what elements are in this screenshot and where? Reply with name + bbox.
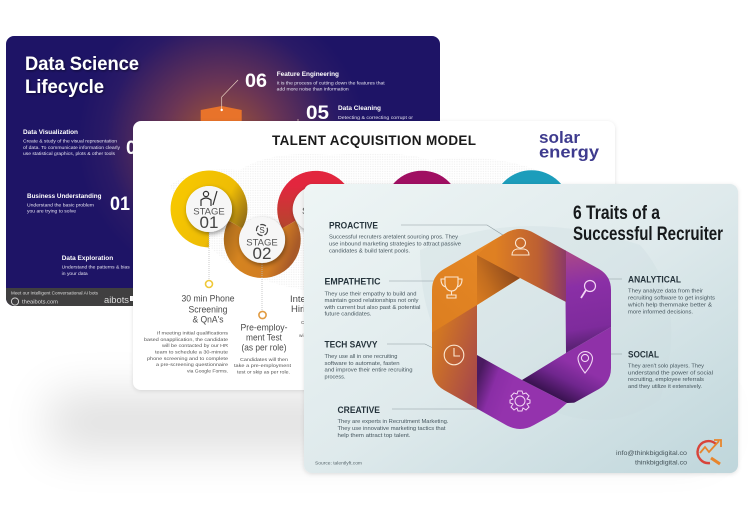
trait: empathetic: future candidates.	[324, 312, 372, 318]
connector lines	[387, 225, 622, 409]
stage 3 title	[290, 294, 328, 315]
step: business understanding: Understand the basic problem	[27, 202, 94, 207]
footer bar: Meet our Intelligent Conversational AI bots	[11, 290, 99, 296]
trait: social: SOCIAL	[628, 350, 659, 360]
icon: magnifier	[581, 280, 596, 298]
stage 2 disc: S	[259, 226, 265, 235]
trait: proactive: Successful recruters aretalent sourcing pros. They	[329, 235, 458, 241]
heading: data science lifecycle	[25, 53, 139, 98]
trait: tech savvy: and improve their entire recruiting	[324, 368, 412, 374]
stage 1 description: a pre-screening questionnaire	[156, 362, 228, 368]
stage 1 description: phone screening and to complete	[147, 356, 228, 362]
heading: data science lifecycle: Data Science	[25, 53, 139, 75]
trait: analytical: which help themmake better &	[627, 302, 712, 308]
stage 1 description	[144, 330, 229, 374]
trait: tech savvy: TECH SAVVY	[324, 340, 378, 350]
stage 1 description: team to schedule a 30-minute	[155, 349, 228, 355]
trait: social	[628, 350, 713, 390]
footer bar	[6, 288, 133, 306]
icon: trophy	[441, 277, 462, 298]
trait: empathetic: maintain good relationships not only	[324, 298, 419, 304]
stage 2 title: Pre-employ-	[240, 322, 288, 334]
footer bar: theaibots.com	[22, 300, 58, 306]
stage 3 title: Hiring	[291, 304, 316, 315]
trait: proactive: PROACTIVE	[329, 220, 378, 232]
stage 2 connector and marker	[259, 263, 266, 319]
stage 3 title: Interview	[290, 294, 328, 305]
trait: tech savvy: They use all in one recruiting	[324, 354, 398, 360]
stage 1 disc	[186, 186, 232, 232]
trait: creative	[338, 405, 449, 439]
hexagon ribbon	[432, 229, 611, 429]
stage 2 disc: 02	[253, 244, 271, 263]
heading: talent acquisition model: TALENT ACQUISITION MODEL	[272, 133, 476, 148]
stage 1 description: will be contacted by our HR	[162, 343, 229, 349]
trait: analytical: They analyze data from their	[628, 289, 703, 295]
trait: social: They aren't solo players. They	[628, 364, 704, 370]
stage 2 title	[240, 322, 288, 354]
step: data exploration: in your data	[62, 271, 88, 276]
icon: person	[512, 238, 529, 255]
stage 3 description: C	[301, 320, 305, 326]
step: data exploration	[62, 255, 130, 276]
step: data cleaning: Detecting & correcting corrupt or	[338, 115, 414, 120]
heading: six traits	[573, 202, 723, 245]
stage 1 disc: 01	[200, 213, 218, 232]
trait: empathetic: EMPATHETIC	[324, 276, 381, 288]
trait: tech savvy	[324, 340, 412, 380]
stage 2 description: test or skip as per role.	[237, 370, 290, 376]
stage 1 description: via Google Forms.	[187, 368, 228, 374]
trait: creative: They are experts in Recruitment Marketing.	[338, 419, 449, 425]
stage 2 title: ment Test	[246, 332, 282, 344]
contact details: thinkbigdigital.co	[635, 460, 687, 466]
stage 2 description: take a pre-employment	[234, 363, 292, 369]
step: data visualization: use statistical graphics, plots & other tools	[23, 151, 116, 156]
trait: social: recruiting, employee referrals	[628, 377, 704, 383]
step: data cleaning: 05	[306, 103, 329, 124]
contact details: info@thinkbigdigital.co	[616, 450, 687, 457]
trait: analytical: recruiting software to get insights	[628, 296, 715, 302]
trait: analytical	[627, 274, 715, 315]
trait: analytical: ANALYTICAL	[628, 274, 681, 286]
stage 3 description: wi	[299, 333, 304, 339]
stage 3 disc: S	[302, 206, 308, 217]
step: feature engineering: add more noise than information	[277, 86, 349, 92]
panel: data science lifecycle card	[6, 36, 440, 306]
logo: solar energy: solar	[539, 128, 580, 147]
stage 2 description: Candidates will then	[240, 357, 288, 363]
icon: map pin	[578, 352, 592, 373]
trait: empathetic: They use their empathy to build and	[324, 291, 416, 297]
ribbon: stage connector rings	[178, 178, 562, 270]
step: data visualization: Create & study of the visual representation	[23, 138, 117, 144]
stage 1 title: 30 min Phone	[182, 294, 234, 304]
step: data visualization: of data. To communicate information clearly	[23, 145, 121, 150]
trait: tech savvy: process.	[324, 374, 346, 380]
trait: creative: CREATIVE	[338, 405, 380, 416]
stage 2 title: (as per role)	[242, 342, 286, 354]
stage 1 title	[182, 294, 234, 326]
stage 1 description: based onapplication, the candidate	[144, 337, 228, 343]
faint world map	[420, 226, 671, 420]
icon: gear	[510, 391, 530, 411]
logo: solar energy	[539, 128, 600, 162]
stage 1 title: & QnA's	[192, 314, 224, 326]
step: feature engineering: It is the process of cutting down the features that	[277, 80, 385, 86]
step: data exploration: Data Exploration	[62, 255, 113, 262]
step: business understanding: 01	[110, 194, 130, 215]
step: data visualization: Data Visualization	[23, 129, 78, 136]
stage 1 disc: STAGE	[193, 206, 225, 218]
stage 3 description	[299, 320, 305, 339]
step: data exploration: Understand the patterns & bias	[62, 265, 130, 270]
icon: clock	[444, 345, 464, 365]
trait: proactive: use inbound marketing strategies to attract passive	[329, 241, 461, 247]
stage 2 disc	[239, 217, 285, 263]
stage 1 description: If meeting initial qualifications	[157, 330, 229, 336]
trait: proactive: candidates & build talent pools.	[329, 249, 410, 255]
trait: analytical: more informed decisions.	[628, 309, 693, 315]
step: feature engineering: 06	[245, 71, 267, 92]
heading: data science lifecycle: Lifecycle	[25, 76, 104, 98]
trait: tech savvy: software to automate, fasten	[324, 361, 400, 367]
step: business understanding: Business Understanding	[27, 193, 102, 200]
trait: empathetic	[323, 276, 420, 318]
step: data visualization: 02	[126, 138, 147, 159]
step: data cleaning	[306, 106, 413, 120]
soft ground shadow beneath the cards	[50, 395, 710, 450]
contact details	[616, 450, 687, 466]
trait: creative: help them attract top talent.	[338, 433, 411, 439]
trait: empathetic: with current but also past & potential	[323, 305, 420, 311]
stage 3 disc	[293, 186, 339, 232]
step: business understanding	[27, 193, 130, 215]
panel: talent acquisition model card	[133, 121, 615, 390]
stage 1 connector and marker	[206, 232, 212, 288]
trait: social: understand the power of social	[628, 371, 713, 377]
stage 2 description	[234, 357, 292, 376]
logo: solar energy: energy	[539, 142, 600, 162]
world map dots	[170, 153, 562, 292]
stage 2 disc: STAGE	[246, 238, 278, 248]
step: feature engineering: Feature Engineering	[277, 71, 339, 78]
trait: proactive	[329, 220, 461, 255]
step: data visualization	[23, 130, 133, 156]
trait: social: and they utilize it extensively.	[628, 384, 702, 390]
orange block with connector	[201, 80, 298, 125]
source note: Source: talentlyft.com	[315, 460, 362, 466]
trait: creative: They use innovative marketing tactics that	[338, 426, 446, 432]
stage 1 title: Screening	[188, 304, 228, 316]
heading: six traits: 6 Traits of a	[573, 202, 660, 224]
logo: think big digital	[698, 440, 721, 464]
footer bar: aibots	[104, 295, 130, 305]
step: feature engineering	[246, 72, 385, 90]
panel: six traits card	[304, 184, 738, 473]
step: business understanding: you are trying to solve	[27, 208, 76, 213]
step: data cleaning: Data Cleaning	[338, 105, 381, 112]
